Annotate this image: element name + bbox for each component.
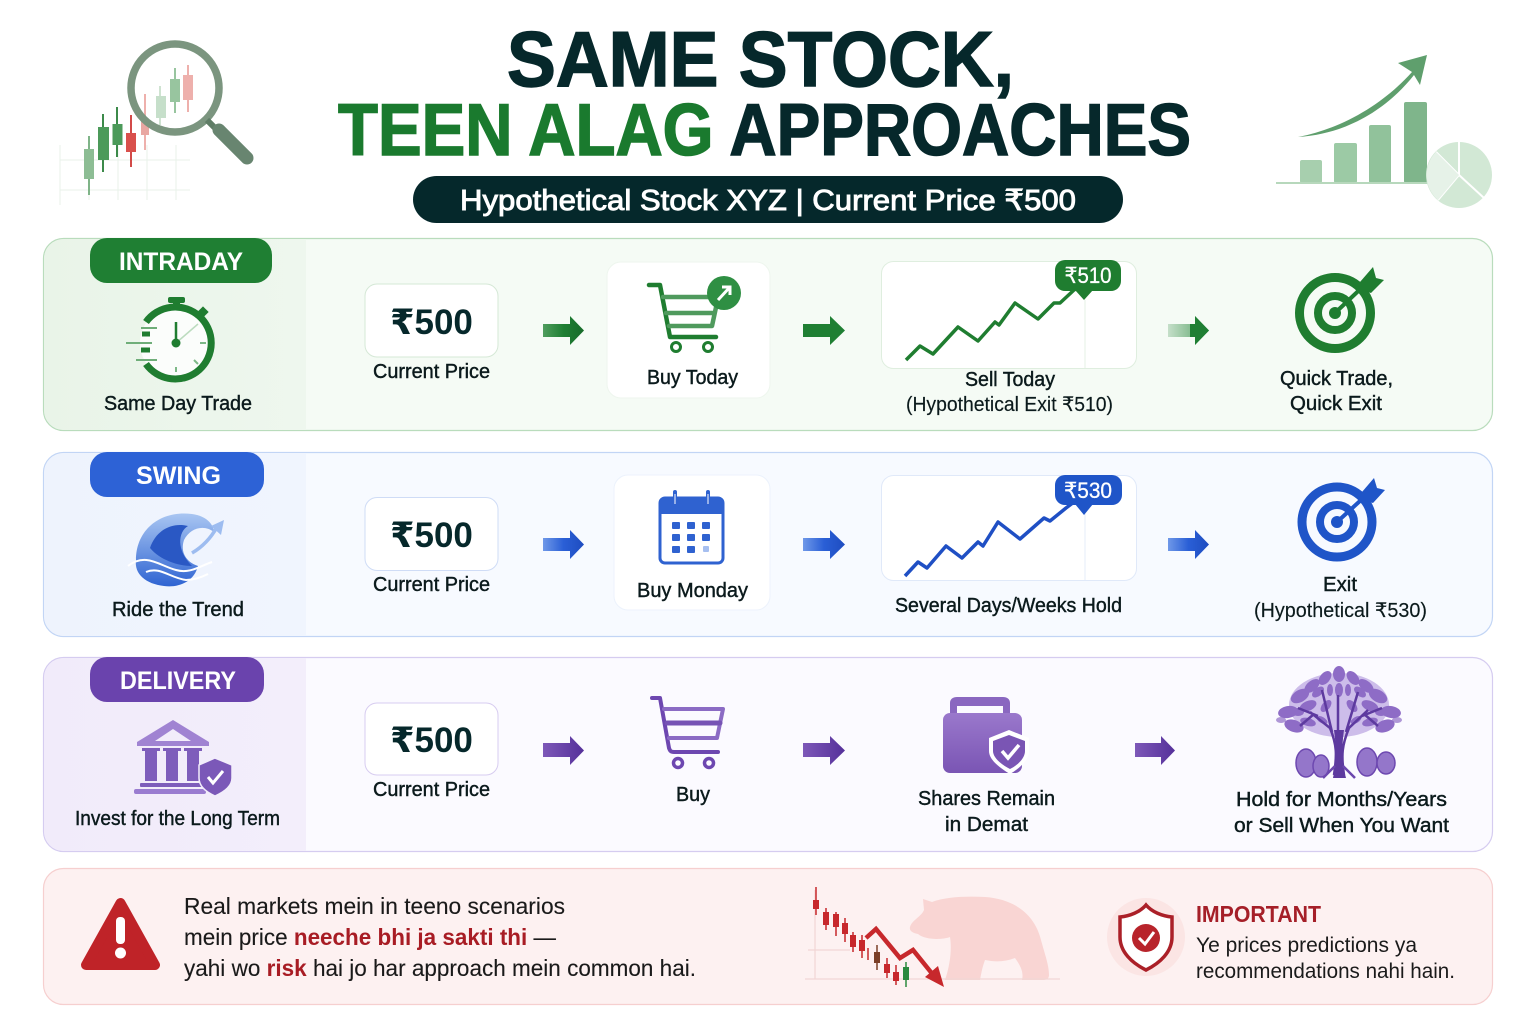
card: sell today chart	[882, 260, 1136, 416]
icon and label: buy	[652, 698, 723, 806]
icon: warning triangle	[86, 903, 155, 965]
card: current price	[365, 284, 498, 383]
card: several days chart: Several Days/Weeks Hold	[895, 595, 1122, 617]
label: ride the trend: Ride the Trend	[112, 599, 244, 621]
badge: delivery: DELIVERY	[120, 667, 236, 695]
card: current price: ₹500	[390, 721, 473, 760]
icon: shield	[1107, 898, 1185, 976]
text: important note: IMPORTANT	[1196, 901, 1321, 927]
card: several days chart: ₹530	[1064, 478, 1112, 503]
card: current price: Current Price	[373, 779, 490, 801]
badge: intraday	[90, 238, 272, 283]
card: sell today chart: (Hypothetical Exit ₹510)	[906, 394, 1113, 416]
panel: intraday	[44, 238, 1492, 430]
card: current price	[365, 703, 498, 801]
arrow	[1135, 736, 1175, 765]
label: in demat: in Demat	[945, 814, 1028, 836]
card: buy today	[607, 262, 770, 398]
card: sell today chart: ₹510	[1064, 263, 1112, 288]
icon: stopwatch	[126, 297, 212, 379]
subtitle pill	[413, 176, 1123, 223]
card: buy monday	[614, 475, 770, 610]
card: current price	[365, 498, 498, 596]
arrow	[543, 736, 584, 765]
text: risk message: mein price neeche bhi ja sakti thi —	[184, 924, 556, 950]
arrow	[543, 316, 584, 345]
arrow	[1168, 530, 1209, 559]
arrow	[543, 530, 584, 559]
panel: risk warning	[44, 868, 1492, 1004]
icon and label: buy: Buy	[676, 784, 710, 806]
icon: target	[1302, 478, 1385, 557]
panel: swing	[44, 452, 1492, 636]
icon: target	[1300, 267, 1384, 348]
text: important note: Ye prices predictions ya	[1196, 934, 1417, 957]
arrow	[803, 316, 845, 345]
badge: swing: SWING	[136, 462, 221, 490]
arrow	[803, 736, 845, 765]
text: risk message: yahi wo risk hai jo har approach mein common hai.	[184, 955, 696, 981]
arrow	[1168, 316, 1209, 345]
arrow	[803, 530, 845, 559]
card: current price: Current Price	[373, 574, 490, 596]
label: hold for months: Hold for Months/Years	[1236, 789, 1447, 811]
label: quick trade: Quick Trade,	[1280, 368, 1393, 390]
subtitle pill: Hypothetical Stock XYZ | Current Price ₹500	[460, 185, 1076, 217]
icon: bear market chart	[805, 887, 1060, 987]
label: same day trade: Same Day Trade	[104, 393, 252, 415]
label: shares remain: Shares Remain	[918, 788, 1055, 810]
title	[338, 15, 1191, 171]
card: current price: Current Price	[373, 361, 490, 383]
label: exit: Exit	[1323, 574, 1357, 596]
label: hypothetical exit: (Hypothetical ₹530)	[1254, 600, 1427, 622]
label: invest long term: Invest for the Long Term	[75, 808, 280, 830]
label: or sell: or Sell When You Want	[1234, 815, 1449, 837]
title: TEEN ALAG APPROACHES	[338, 90, 1191, 171]
badge: delivery	[90, 657, 264, 702]
text: risk message	[184, 893, 696, 981]
card: current price: ₹500	[390, 516, 473, 555]
icon: bank and shield	[134, 720, 232, 796]
panel: delivery	[44, 657, 1492, 852]
badge: intraday: INTRADAY	[119, 248, 243, 276]
card: current price: ₹500	[390, 303, 473, 342]
icon: tree and coins	[1276, 666, 1402, 778]
icon: growth bars and pie	[1276, 55, 1492, 208]
card: several days chart	[882, 475, 1136, 617]
text: important note: recommendations nahi hain.	[1196, 960, 1455, 983]
card: buy monday: Buy Monday	[637, 580, 748, 602]
badge: swing	[90, 452, 264, 497]
icon: wave	[128, 513, 224, 586]
icon: demat wallet with shield	[943, 697, 1029, 774]
text: important note	[1196, 901, 1455, 983]
icon: magnifier over candlesticks	[60, 44, 247, 205]
title: SAME STOCK,	[507, 15, 1014, 103]
card: buy today: Buy Today	[647, 367, 738, 389]
card: sell today chart: Sell Today	[965, 369, 1055, 391]
text: risk message: Real markets mein in teeno scenarios	[184, 893, 565, 919]
label: quick exit: Quick Exit	[1290, 393, 1382, 415]
